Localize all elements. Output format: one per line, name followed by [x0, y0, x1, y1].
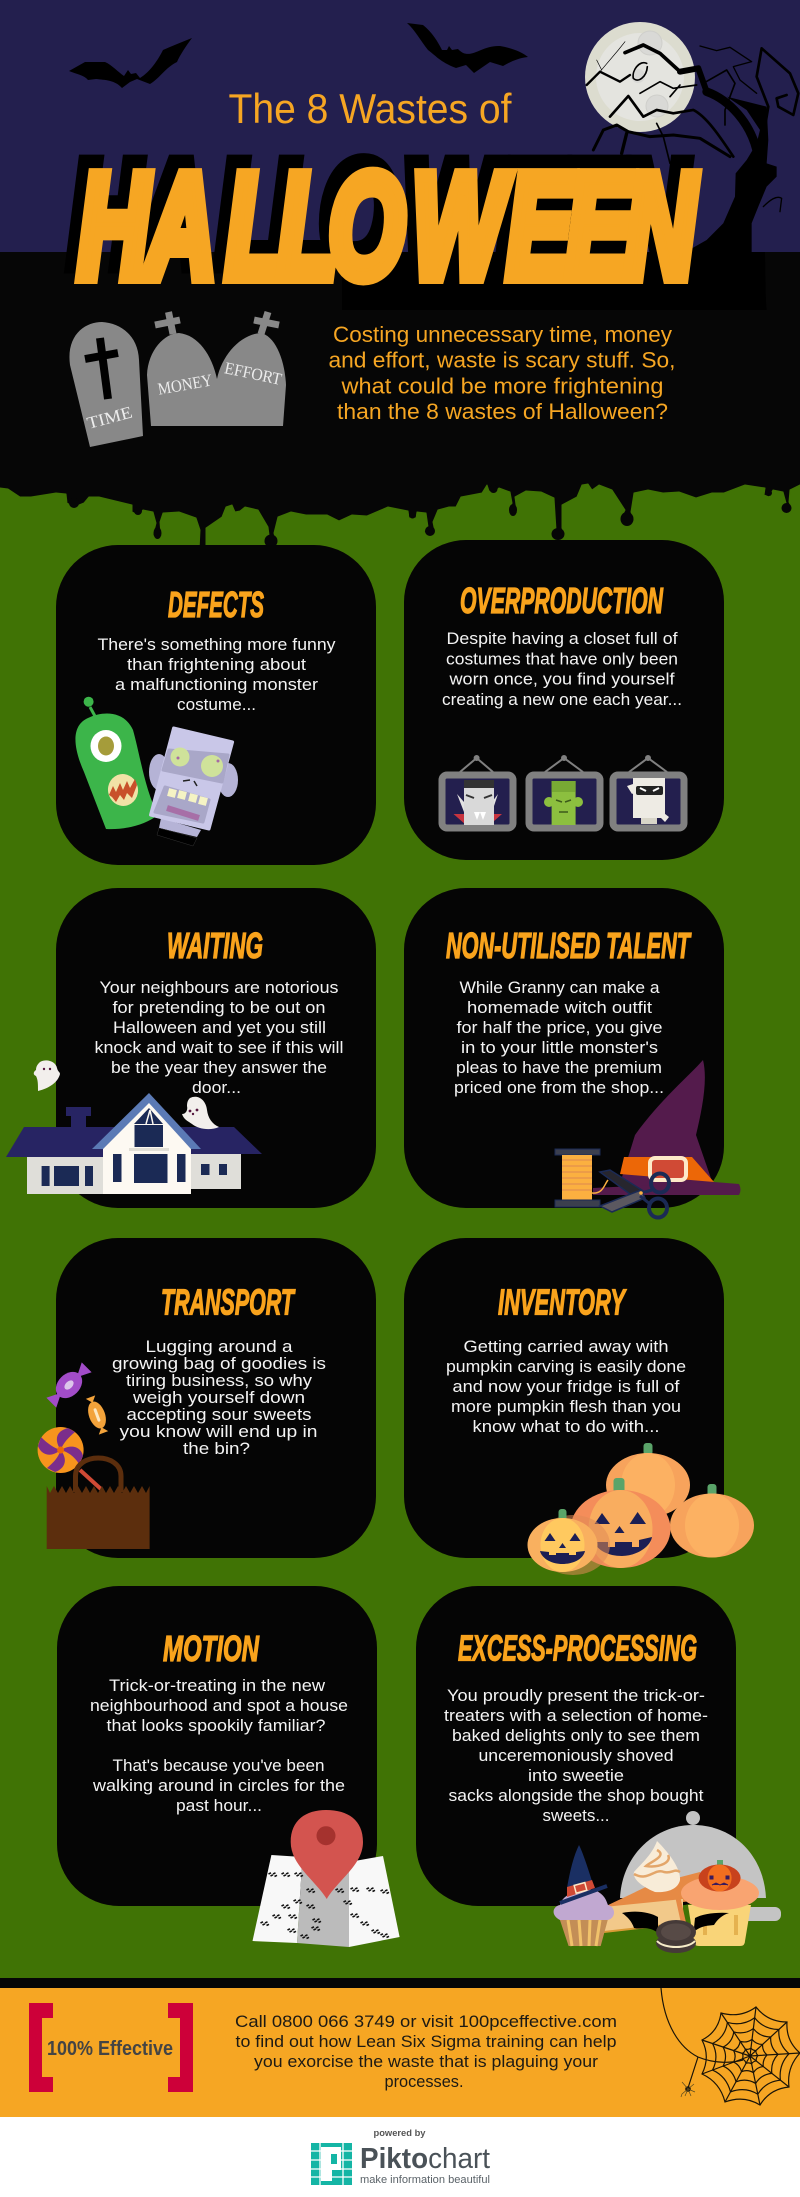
text: excess-processing: You proudly present the trick-or-	[447, 1686, 705, 1705]
icon: mummy portrait	[613, 755, 684, 828]
text: defects: costume...	[177, 695, 256, 714]
intro text	[328, 322, 676, 424]
text: motion: past hour...	[176, 1796, 262, 1815]
icon: spider	[681, 2082, 695, 2097]
icon: full moon	[585, 22, 695, 132]
logo: 100% Effective: 100% Effective	[47, 2038, 173, 2060]
text: defects: a malfunctioning monster	[115, 675, 318, 694]
icon: purple wrapped sweet	[44, 1360, 94, 1410]
text: call to action: to find out how Lean Six Sigma training can help	[236, 2032, 616, 2051]
text: non-utilised talent: in to your little monster's	[461, 1038, 658, 1057]
text: call to action	[235, 2012, 617, 2091]
text: motion: That's because you've been	[112, 1756, 324, 1775]
icon: small ghost	[34, 1060, 60, 1091]
text: overproduction	[442, 629, 682, 709]
panel: overproduction	[404, 540, 724, 860]
icon: tombstones	[69, 312, 286, 447]
text: transport: the bin?	[183, 1439, 250, 1458]
icon: frankenstein portrait	[529, 755, 600, 828]
icon: witch hat	[593, 1060, 740, 1195]
text: overproduction: creating a new one each year...	[442, 690, 682, 709]
text: transport: growing bag of goodies is	[112, 1354, 326, 1373]
text: inventory: know what to do with...	[472, 1417, 660, 1436]
icon: jack-o-lantern small	[528, 1509, 610, 1575]
text: excess-processing: sweets...	[542, 1806, 610, 1825]
icon: ghost on roof	[182, 1097, 219, 1129]
icon: tombstones: EFFORT	[223, 358, 284, 389]
text: call to action: Call 0800 066 3749 or visit 100pceffective.com	[235, 2012, 617, 2031]
text: waiting: Your neighbours are notorious	[100, 978, 338, 997]
intro text: and effort, waste is scary stuff. So,	[328, 348, 676, 373]
text: defects: There's something more funny	[98, 635, 336, 654]
text: excess-processing: into sweetie	[528, 1766, 624, 1785]
slime drip bulbs	[69, 485, 792, 548]
text: non-utilised talent: While Granny can make a	[460, 978, 660, 997]
icon: pumpkin cupcake	[681, 1860, 759, 1946]
text: waiting: Halloween and yet you still	[113, 1018, 326, 1037]
icon: thread spool	[555, 1149, 608, 1207]
text: make information beautiful: make information beautiful	[360, 2174, 490, 2186]
icon: right bat	[407, 23, 528, 73]
text: powered by: powered by	[374, 2128, 426, 2139]
green slime background with drips	[0, 484, 800, 1978]
text: inventory: Getting carried away with	[464, 1337, 668, 1356]
icon: robot monster	[149, 728, 238, 846]
text: motion: neighbourhood and spot a house	[90, 1696, 348, 1715]
icon: map with footprints and pin	[252, 1810, 400, 1947]
icon: tombstones: TIME	[85, 403, 134, 433]
panel: non-utilised talent	[404, 888, 740, 1218]
heading: Halloween: HALLOWEEN	[78, 142, 697, 309]
panel: defects	[56, 545, 376, 865]
text: non-utilised talent: priced one from the shop...	[454, 1078, 664, 1097]
intro text: Costing unnecessary time, money	[333, 322, 673, 347]
panel: waiting	[6, 888, 376, 1208]
text: transport: accepting sour sweets	[126, 1405, 312, 1424]
text: motion	[90, 1676, 348, 1815]
text: defects: than frightening about	[127, 655, 306, 674]
text: non-utilised talent: for half the price, you give	[456, 1018, 662, 1037]
text: transport	[112, 1337, 326, 1458]
icon: right pumpkin	[670, 1484, 754, 1558]
icon: witch hat cupcake	[554, 1845, 614, 1946]
icon: oreo bat	[622, 1912, 729, 1953]
text: motion: that looks spookily familiar?	[106, 1716, 326, 1735]
panel: transport	[38, 1238, 376, 1558]
icon: orange wrapped sweet	[83, 1394, 111, 1436]
icon: lollipop	[38, 1427, 102, 1490]
ground mound	[342, 252, 766, 310]
text: waiting	[94, 978, 344, 1097]
icon: left bat	[69, 38, 192, 88]
text: call to action: processes.	[384, 2072, 464, 2091]
text: excess-processing: baked delights only to see them	[452, 1726, 700, 1745]
text: defects	[98, 635, 336, 714]
heading: The 8 Wastes of: The 8 Wastes of	[228, 85, 512, 132]
panel: excess-processing	[416, 1586, 781, 1953]
text: motion: Trick-or-treating in the new	[109, 1676, 326, 1695]
text: transport: Lugging around a	[146, 1337, 293, 1356]
text: excess-processing: unceremoniously shoved	[478, 1746, 674, 1765]
text: inventory: and now your fridge is full of	[452, 1377, 680, 1396]
logo: 100% Effective	[29, 2003, 193, 2092]
text: inventory	[446, 1337, 686, 1436]
text: inventory: pumpkin carving is easily done	[446, 1357, 686, 1376]
text: transport: tiring business, so why	[126, 1371, 313, 1390]
heading: waiting: WAITING	[167, 925, 263, 966]
icon: whipped cream	[634, 1841, 680, 1892]
text: non-utilised talent	[454, 978, 664, 1097]
icon: top pumpkin	[606, 1443, 690, 1517]
text: excess-processing	[444, 1686, 708, 1825]
text: waiting: door...	[192, 1078, 241, 1097]
text: transport: you know will end up in	[120, 1422, 318, 1441]
text: non-utilised talent: pleas to have the premium	[456, 1058, 662, 1077]
panel: motion	[57, 1586, 400, 1947]
icon: haunted house	[6, 1093, 262, 1194]
text: overproduction: costumes that have only been	[446, 650, 678, 668]
heading: overproduction: OVERPRODUCTION	[460, 580, 664, 621]
footer divider	[0, 1978, 800, 1988]
text: inventory: more pumpkin flesh than you	[451, 1397, 681, 1416]
text: waiting: for pretending to be out on	[112, 998, 326, 1017]
text: non-utilised talent: homemade witch outfit	[467, 998, 652, 1017]
icon: pumpkin pie slice	[604, 1872, 700, 1932]
icon: dracula portrait	[442, 755, 513, 828]
heading: Halloween: HALLOWEEN	[69, 130, 688, 297]
text: waiting: be the year they answer the	[111, 1058, 327, 1077]
text: excess-processing: sacks alongside the shop bought	[448, 1786, 704, 1805]
text: waiting: knock and wait to see if this will	[94, 1038, 344, 1057]
footer: powered by Piktochart	[0, 2117, 800, 2197]
panel: call to action	[0, 1988, 800, 2117]
night sky	[0, 0, 800, 252]
icon: tombstones: MONEY	[156, 370, 214, 399]
heading: motion: MOTION	[163, 1628, 260, 1669]
text: transport: weigh yourself down	[132, 1388, 305, 1407]
text: call to action: you exorcise the waste that is plaguing your	[254, 2052, 598, 2071]
text: overproduction: worn once, you find yourself	[448, 670, 675, 688]
text: motion: walking around in circles for the	[92, 1776, 345, 1795]
icon: serving cloche	[620, 1811, 781, 1921]
text: overproduction: Despite having a closet full of	[446, 629, 678, 648]
heading: inventory: INVENTORY	[498, 1282, 627, 1322]
text: Piktochart wordmark: Piktochart	[360, 2143, 490, 2175]
text: excess-processing: treaters with a selection of home-	[444, 1706, 708, 1725]
heading: defects: DEFECTS	[168, 584, 264, 625]
intro text: than the 8 wastes of Halloween?	[337, 399, 668, 424]
icon: spider web	[661, 1988, 800, 2105]
icon: green one-eyed monster	[75, 697, 158, 829]
icon: scissors	[600, 1170, 669, 1218]
icon: jack-o-lantern large	[570, 1478, 670, 1568]
intro text: what could be more frightening	[340, 374, 664, 398]
icon: bare tree silhouette	[587, 42, 798, 310]
panel: inventory	[404, 1238, 754, 1575]
icon: goodie bag	[47, 1458, 150, 1549]
icon: piktochart logo mark	[311, 2143, 352, 2185]
heading: transport: TRANSPORT	[161, 1282, 296, 1322]
